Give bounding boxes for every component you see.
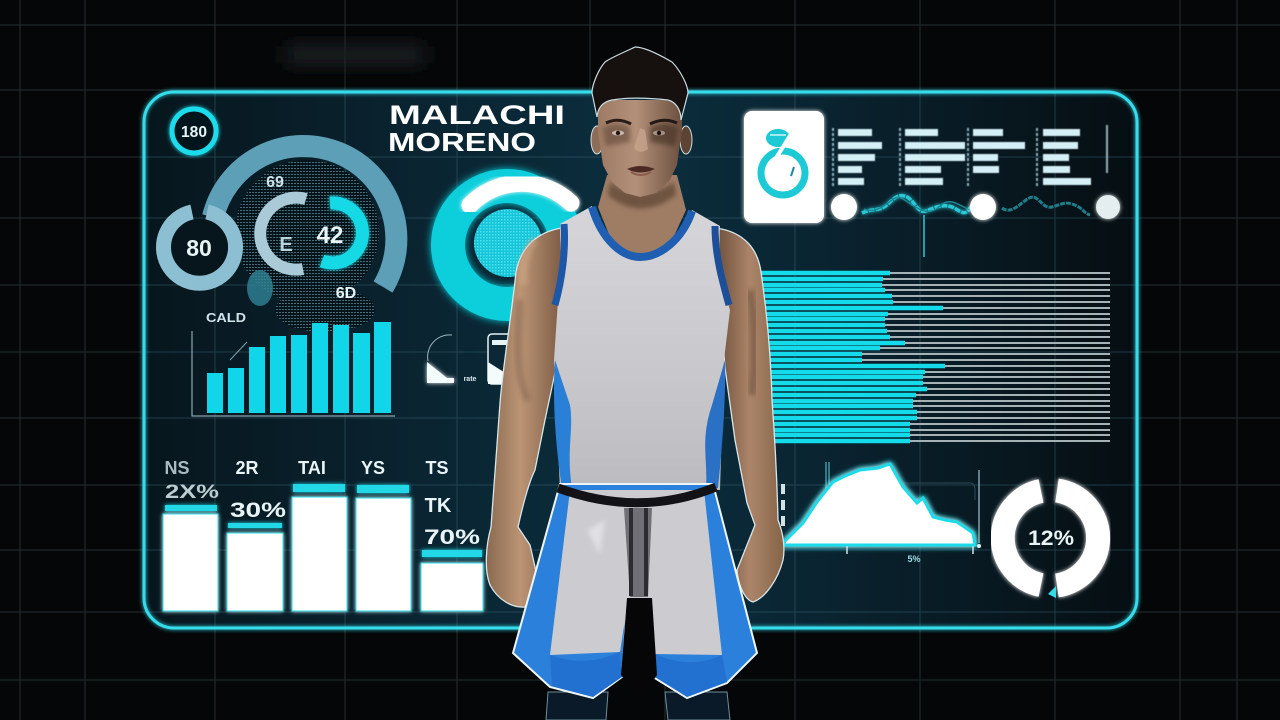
white bar chart: 70% xyxy=(424,526,480,549)
radial gauges: 42 xyxy=(317,222,343,249)
donut chart: 12% xyxy=(1028,527,1074,550)
white bar chart: TAI xyxy=(298,458,326,478)
jersey xyxy=(554,206,730,490)
radial gauges: CALD xyxy=(206,310,246,325)
shorts xyxy=(513,484,757,700)
white bar chart: TS xyxy=(425,458,449,478)
small icons: rate xyxy=(464,376,477,383)
donut chart xyxy=(1003,490,1098,598)
area chart: 5% xyxy=(907,554,921,564)
cyan ring gauge xyxy=(448,183,571,304)
white logo card xyxy=(744,111,824,223)
head and neck xyxy=(591,47,692,262)
dashboard panel xyxy=(144,92,1137,628)
wave sparkline with nodes xyxy=(831,194,1120,257)
legs xyxy=(546,600,730,720)
white bar chart: TK xyxy=(425,495,452,517)
white bar chart: 2X% xyxy=(165,482,219,503)
title: MORENO xyxy=(388,127,536,157)
small icons xyxy=(427,334,514,384)
horizontal stripe chart xyxy=(760,273,1110,441)
top-left badge xyxy=(172,109,216,153)
stat list bars xyxy=(833,125,1108,188)
white bar chart xyxy=(163,458,483,611)
title: MALACHI xyxy=(389,100,565,130)
cyan bar chart xyxy=(192,322,395,416)
title xyxy=(388,100,565,157)
radial gauges: 69 xyxy=(266,174,284,191)
area chart xyxy=(783,462,981,564)
player figure xyxy=(486,47,784,720)
white bar chart: YS xyxy=(361,458,385,478)
white bar chart: 2R xyxy=(235,458,259,478)
white bar chart: 30% xyxy=(230,499,286,522)
white bar chart: NS xyxy=(164,458,190,478)
radial gauges: 80 xyxy=(186,235,212,261)
radial gauges xyxy=(164,146,396,332)
radial gauges: E xyxy=(279,234,293,256)
top-left badge: 180 xyxy=(181,124,207,141)
radial gauges: 6D xyxy=(336,285,356,302)
arms xyxy=(486,228,784,607)
